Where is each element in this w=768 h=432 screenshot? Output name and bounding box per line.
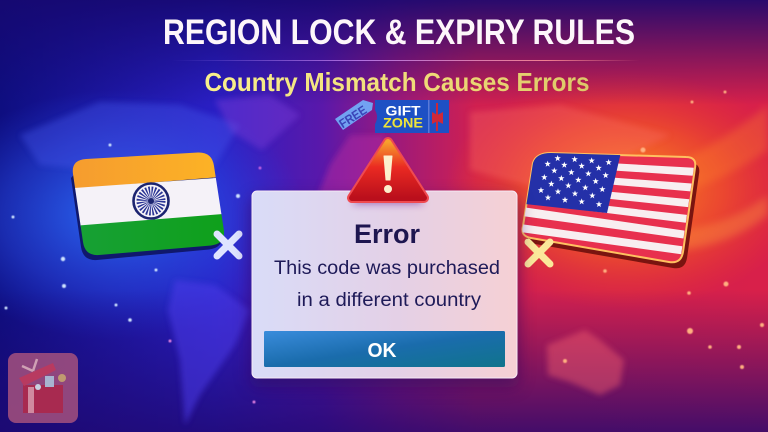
ticket <box>375 100 449 133</box>
stars <box>538 155 612 207</box>
world map silhouettes <box>20 95 670 425</box>
usa flag <box>520 150 699 268</box>
title: REGION LOCK & EXPIRY RULES <box>163 13 635 52</box>
gift zone wordmark: GIFT <box>386 102 421 118</box>
ok button: OK <box>368 340 397 362</box>
subtitle: Country Mismatch Causes Errors <box>204 67 590 97</box>
sparkles <box>4 90 764 404</box>
gift zone wordmark: ZONE <box>383 114 423 130</box>
ok button <box>264 331 505 367</box>
gift zone wordmark <box>383 102 423 130</box>
message: This code was purchased <box>274 258 500 279</box>
ashoka chakra <box>134 184 168 218</box>
free tag: FREE <box>337 103 369 131</box>
watermark: gift box <box>8 353 78 423</box>
india x mark <box>217 234 239 256</box>
usa x mark <box>528 242 550 264</box>
canton <box>525 150 621 213</box>
warning triangle icon <box>352 142 424 204</box>
error heading: Error <box>354 219 420 249</box>
message <box>274 258 500 311</box>
logo: free gift zone <box>335 100 449 133</box>
india flag <box>71 152 224 260</box>
message: in a different country <box>297 290 482 311</box>
stripes <box>520 150 694 254</box>
error dialog <box>250 191 519 387</box>
